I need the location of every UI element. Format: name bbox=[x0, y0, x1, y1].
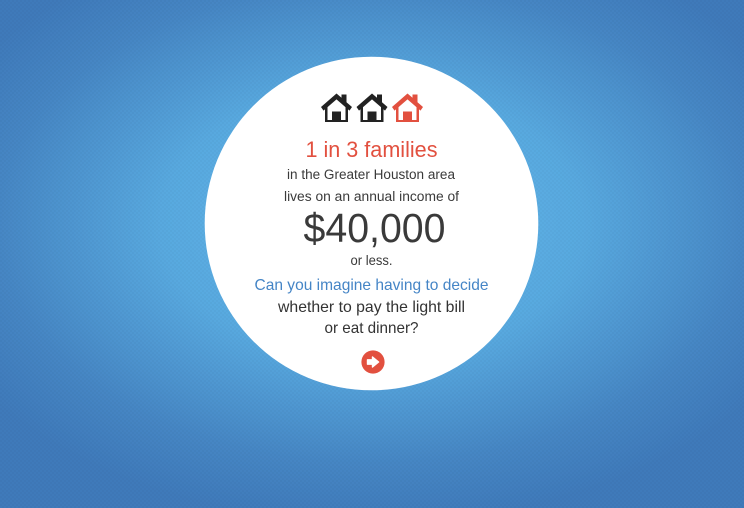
text: annual income: lives on an annual income of bbox=[284, 189, 459, 204]
icon: black house 1 bbox=[321, 94, 352, 122]
figure: $40,000: $40,000 bbox=[304, 205, 446, 251]
text: or less: or less. bbox=[350, 253, 392, 268]
panel: white circle bbox=[205, 57, 538, 390]
icon: red house bbox=[392, 94, 423, 122]
icon: black house 2 bbox=[356, 94, 388, 122]
icon: next arrow button bbox=[361, 350, 385, 374]
question: blue line: Can you imagine having to decide bbox=[254, 277, 489, 294]
question: eat dinner: or eat dinner? bbox=[324, 320, 419, 337]
question: light bill: whether to pay the light bill bbox=[277, 299, 465, 316]
text: Greater Houston area: in the Greater Houston area bbox=[287, 167, 455, 182]
heading: 1 in 3 families: 1 in 3 families bbox=[306, 137, 438, 162]
